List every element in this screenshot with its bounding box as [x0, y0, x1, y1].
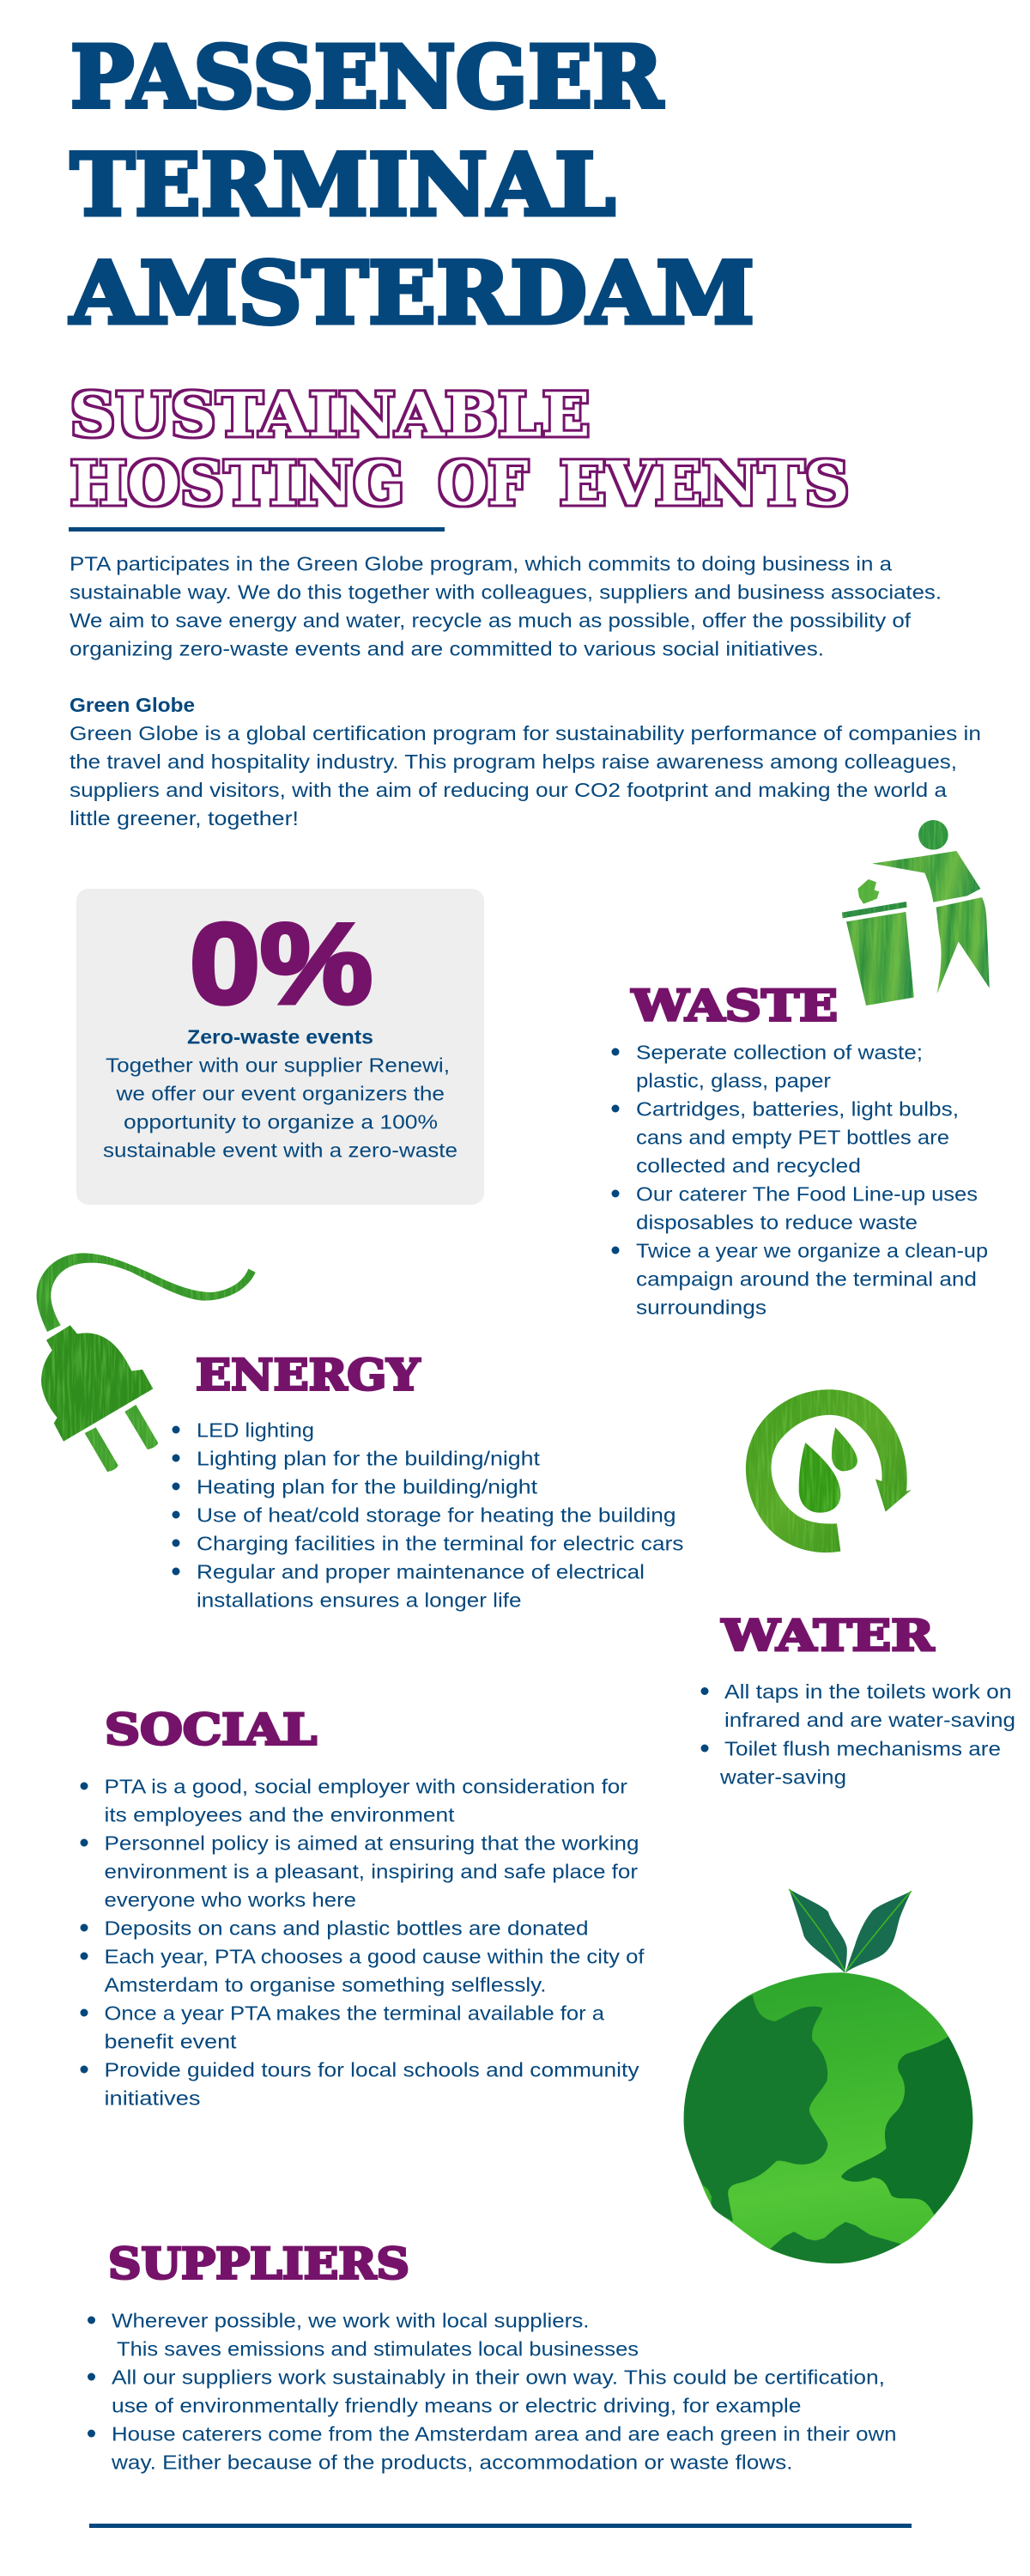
waste list: Cartridges, batteries, light bulbs, [636, 1097, 959, 1120]
social list: Amsterdam to organise something selflessly. [105, 1973, 546, 1996]
waste list: Our caterer The Food Line-up uses [636, 1183, 978, 1206]
zero-waste text: sustainable event with a zero-waste [103, 1139, 457, 1161]
energy list: Regular and proper maintenance of electrical [197, 1561, 645, 1583]
title: TERMINAL [70, 136, 615, 235]
energy list: Charging facilities in the terminal for electric cars [197, 1532, 683, 1554]
energy list: Lighting plan for the building/night [197, 1448, 541, 1470]
social list [81, 1776, 645, 2109]
subtitle: HOSTING [70, 448, 405, 519]
waste list: Twice a year we organize a clean-up [636, 1240, 988, 1262]
water list [700, 1680, 1015, 1788]
icon: green globe with leaves [684, 1889, 972, 2263]
social list: Personnel policy is aimed at ensuring that the working [105, 1832, 639, 1855]
waste list: collected and recycled [636, 1154, 861, 1176]
social list: Each year, PTA chooses a good cause within the city of [105, 1946, 645, 1968]
suppliers list: Wherever possible, we work with local suppliers. [112, 2310, 589, 2332]
social list: everyone who works here [105, 1889, 356, 1911]
waste list: plastic, glass, paper [636, 1070, 831, 1092]
water list: Toilet flush mechanisms are [724, 1738, 1001, 1760]
icon: person throwing waste in a bin [842, 820, 990, 1005]
bottom rule [89, 2524, 912, 2528]
icon: water cycle arrow with drops [746, 1389, 912, 1552]
icon: power plug [37, 1253, 256, 1472]
title [70, 27, 754, 343]
waste list: Seperate collection of waste; [636, 1041, 923, 1063]
intro text: organizing zero-waste events and are committed to various social initiatives. [70, 637, 824, 659]
green globe text: Green Globe is a global certification program for sustainability performance of companies in [70, 722, 981, 744]
zero-waste text: Zero-waste events [187, 1025, 373, 1048]
social list: its employees and the environment [105, 1803, 455, 1826]
water heading: WATER [721, 1610, 935, 1661]
waste list: surroundings [636, 1297, 766, 1319]
subtitle: EVENTS [560, 448, 850, 519]
subtitle: SUSTAINABLE [70, 380, 591, 451]
water list: water-saving [719, 1765, 846, 1788]
social list: initiatives [105, 2087, 201, 2109]
social list: Once a year PTA makes the terminal available for a [105, 2002, 605, 2025]
energy list [172, 1419, 683, 1611]
zero-waste text: we offer our event organizers the [115, 1082, 445, 1104]
energy list: Heating plan for the building/night [197, 1475, 538, 1498]
social list: benefit event [105, 2030, 237, 2052]
energy list: LED lighting [197, 1419, 314, 1441]
heading rule [69, 527, 445, 532]
waste list [611, 1041, 988, 1319]
intro text: sustainable way. We do this together with colleagues, suppliers and business associates. [70, 580, 942, 603]
social heading: SOCIAL [105, 1704, 317, 1755]
social list: environment is a pleasant, inspiring and safe place for [105, 1860, 638, 1882]
suppliers list [88, 2310, 896, 2473]
social list: Provide guided tours for local schools and community [105, 2059, 639, 2081]
zero-waste text: Together with our supplier Renewi, [106, 1054, 450, 1077]
title: PASSENGER [70, 27, 663, 127]
waste list: disposables to reduce waste [636, 1211, 918, 1233]
suppliers list: use of environmentally friendly means or electric driving, for example [112, 2394, 802, 2416]
suppliers list: All our suppliers work sustainably in their own way. This could be certification, [112, 2366, 885, 2389]
green globe text: the travel and hospitality industry. This program helps raise awareness among colleagues, [70, 750, 957, 773]
social list: Deposits on cans and plastic bottles are donated [105, 1917, 589, 1939]
water list: All taps in the toilets work on [724, 1680, 1011, 1703]
waste list: cans and empty PET bottles are [636, 1127, 949, 1149]
waste heading: WASTE [631, 981, 838, 1030]
green globe text [70, 694, 981, 829]
zero-waste text [103, 1025, 457, 1161]
title: AMSTERDAM [70, 244, 754, 343]
big number 0%: 0% [190, 901, 373, 1028]
intro text: PTA participates in the Green Globe program, which commits to doing business in a [70, 553, 893, 575]
subtitle [70, 380, 850, 519]
suppliers heading: SUPPLIERS [108, 2238, 409, 2289]
intro text: We aim to save energy and water, recycle as much as possible, offer the possibility of [70, 610, 912, 632]
waste list: campaign around the terminal and [636, 1267, 977, 1290]
social list: PTA is a good, social employer with consideration for [105, 1776, 627, 1798]
suppliers list: House caterers come from the Amsterdam area and are each green in their own [112, 2423, 896, 2445]
green globe text: suppliers and visitors, with the aim of reducing our CO2 footprint and making the world a [70, 779, 948, 801]
suppliers list: way. Either because of the products, accommodation or waste flows. [111, 2451, 792, 2473]
subtitle: OF [438, 448, 529, 519]
green globe text: Green Globe [70, 694, 195, 716]
water list: infrared and are water-saving [724, 1709, 1015, 1731]
intro text [70, 553, 942, 659]
energy list: Use of heat/cold storage for heating the building [197, 1504, 676, 1527]
energy heading: ENERGY [196, 1350, 421, 1400]
green globe text: little greener, together! [70, 807, 299, 829]
zero-waste text: opportunity to organize a 100% [124, 1111, 438, 1133]
energy list: installations ensures a longer life [197, 1589, 522, 1611]
panel: zero-waste events [76, 889, 484, 1205]
suppliers list: This saves emissions and stimulates local businesses [117, 2337, 639, 2360]
